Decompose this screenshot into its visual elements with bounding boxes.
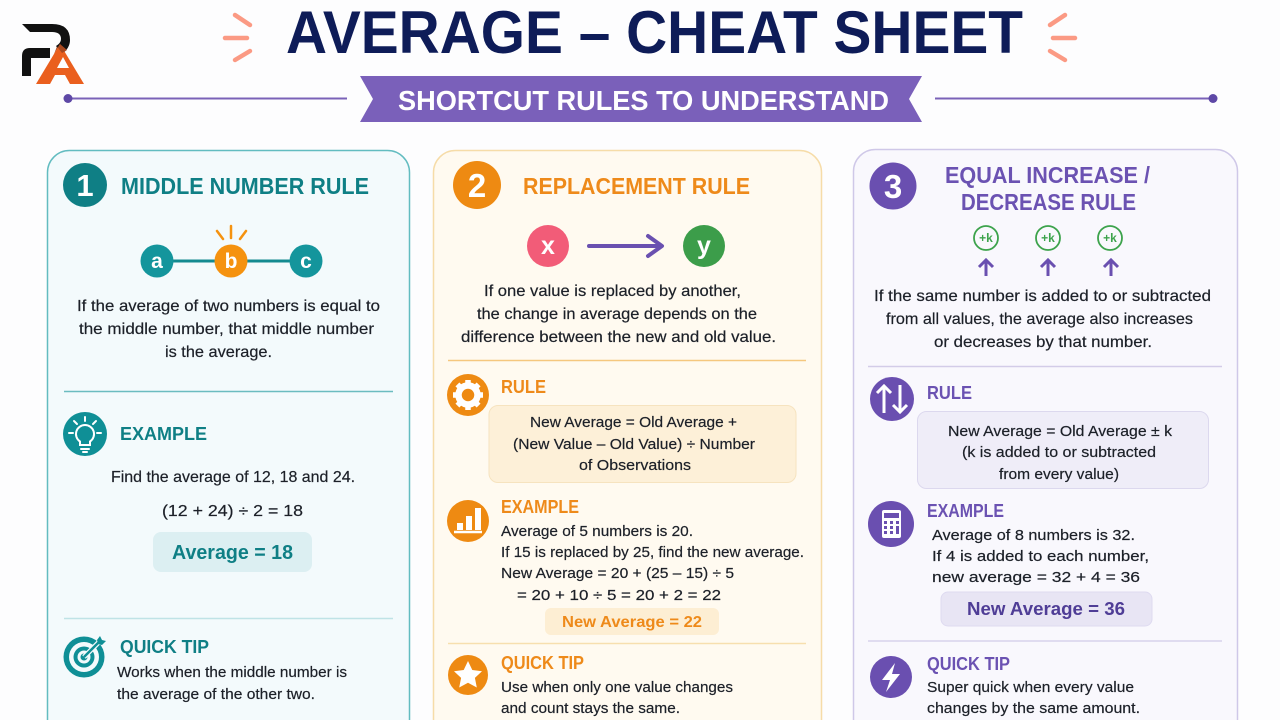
icon: right sparkle — [1050, 15, 1075, 60]
description: the middle number, that middle number — [79, 321, 375, 338]
diagram: plus k arrows: +k — [979, 231, 993, 245]
quick tip: Use when only one value changes — [501, 679, 733, 696]
example text: (12 + 24) ÷ 2 = 18 — [162, 503, 303, 520]
rule box — [489, 406, 796, 482]
example: = 20 + 10 ÷ 5 = 20 + 2 = 22 — [517, 587, 721, 604]
description: from all values, the average also increases — [886, 311, 1193, 328]
icon: calculator — [868, 501, 914, 547]
panel: middle number rule — [48, 150, 410, 720]
rule box: New Average = Old Average ± k — [948, 423, 1173, 440]
panel: equal increase / decrease rule — [854, 150, 1238, 720]
example: Average of 5 numbers is 20. — [501, 523, 693, 540]
description: difference between the new and old value. — [461, 329, 776, 346]
description: If the average of two numbers is equal to — [77, 298, 380, 315]
diagram: plus k arrows: +k — [1103, 231, 1117, 245]
description — [461, 283, 776, 346]
icon: left sparkle — [225, 15, 250, 60]
diagram: x to y: x — [541, 232, 555, 260]
quick tip: Super quick when every value — [927, 679, 1134, 696]
description — [874, 288, 1211, 351]
result box: New Average = 36 — [967, 599, 1125, 619]
rule label: RULE — [927, 382, 972, 403]
heading: MIDDLE NUMBER RULE — [121, 173, 369, 199]
subtitle banner — [360, 76, 922, 122]
quick tip: QUICK TIP — [120, 636, 209, 657]
left connector — [64, 94, 347, 103]
example: New Average = 20 + (25 – 15) ÷ 5 — [501, 565, 734, 582]
example: EXAMPLE — [501, 496, 579, 517]
description: If the same number is added to or subtracted — [874, 288, 1211, 305]
badge 2: 2 — [468, 167, 486, 204]
diagram: plus k arrows: +k — [1041, 231, 1055, 245]
description: is the average. — [165, 344, 272, 361]
diagram: x to y: y — [697, 232, 711, 260]
heading: REPLACEMENT RULE — [523, 173, 750, 199]
badge 3: 3 — [884, 168, 902, 205]
quick tip — [927, 653, 1140, 717]
rule box: (k is added to or subtracted — [962, 444, 1156, 461]
icon: lightning bolt — [870, 656, 912, 698]
example label: EXAMPLE — [120, 423, 207, 444]
diagram: a b c: b — [225, 250, 237, 273]
example: If 4 is added to each number, — [932, 548, 1149, 565]
quick tip — [117, 636, 347, 703]
right connector — [935, 94, 1218, 103]
example text — [111, 469, 355, 520]
panel: replacement rule — [434, 150, 822, 720]
heading — [945, 162, 1150, 215]
heading: EQUAL INCREASE / — [945, 162, 1150, 188]
icon: star — [448, 655, 488, 695]
icon: light bulb — [63, 412, 107, 456]
diagram: a b c — [140, 226, 322, 278]
diagram: a b c: c — [300, 250, 312, 273]
example: Average of 8 numbers is 32. — [932, 527, 1135, 544]
description: or decreases by that number. — [934, 334, 1152, 351]
heading: DECREASE RULE — [961, 189, 1136, 215]
quick tip: QUICK TIP — [927, 653, 1010, 674]
quick tip: changes by the same amount. — [927, 700, 1140, 717]
rule box: from every value) — [999, 466, 1119, 483]
example: EXAMPLE — [927, 500, 1004, 521]
diagram: plus k arrows — [974, 226, 1122, 276]
subtitle banner: SHORTCUT RULES TO UNDERSTAND — [398, 85, 889, 116]
quick tip: the average of the other two. — [117, 686, 315, 703]
description: the change in average depends on the — [477, 306, 757, 323]
badge 1: 1 — [76, 168, 94, 203]
logo — [22, 24, 84, 84]
title: AVERAGE – CHEAT SHEET — [286, 0, 1023, 66]
result box — [545, 608, 719, 635]
diagram: x to y — [527, 225, 725, 267]
badge 2 — [453, 161, 501, 209]
icon: target — [64, 636, 106, 678]
example: If 15 is replaced by 25, find the new average. — [501, 544, 804, 561]
rule box: (New Value – Old Value) ÷ Number — [513, 436, 755, 453]
rule label: RULE — [501, 376, 546, 397]
badge 1 — [63, 163, 107, 207]
quick tip: and count stays the same. — [501, 700, 680, 717]
quick tip: Works when the middle number is — [117, 664, 347, 681]
result box: New Average = 22 — [562, 614, 702, 631]
icon: up down arrows — [870, 377, 914, 421]
description — [77, 298, 380, 361]
diagram: a b c: a — [151, 250, 163, 273]
result box — [941, 592, 1152, 626]
quick tip: QUICK TIP — [501, 652, 584, 673]
description: If one value is replaced by another, — [484, 283, 741, 300]
result box — [153, 532, 312, 572]
example text: Find the average of 12, 18 and 24. — [111, 469, 355, 486]
example — [927, 500, 1149, 586]
rule box: of Observations — [579, 457, 691, 474]
icon: gear — [447, 374, 489, 416]
badge 3 — [870, 162, 916, 210]
quick tip — [501, 652, 733, 717]
rule box — [918, 412, 1208, 488]
icon: bar chart — [447, 500, 489, 542]
result box: Average = 18 — [172, 542, 293, 564]
rule box: New Average = Old Average + — [530, 414, 737, 431]
example: new average = 32 + 4 = 36 — [932, 569, 1140, 586]
example — [501, 496, 804, 604]
